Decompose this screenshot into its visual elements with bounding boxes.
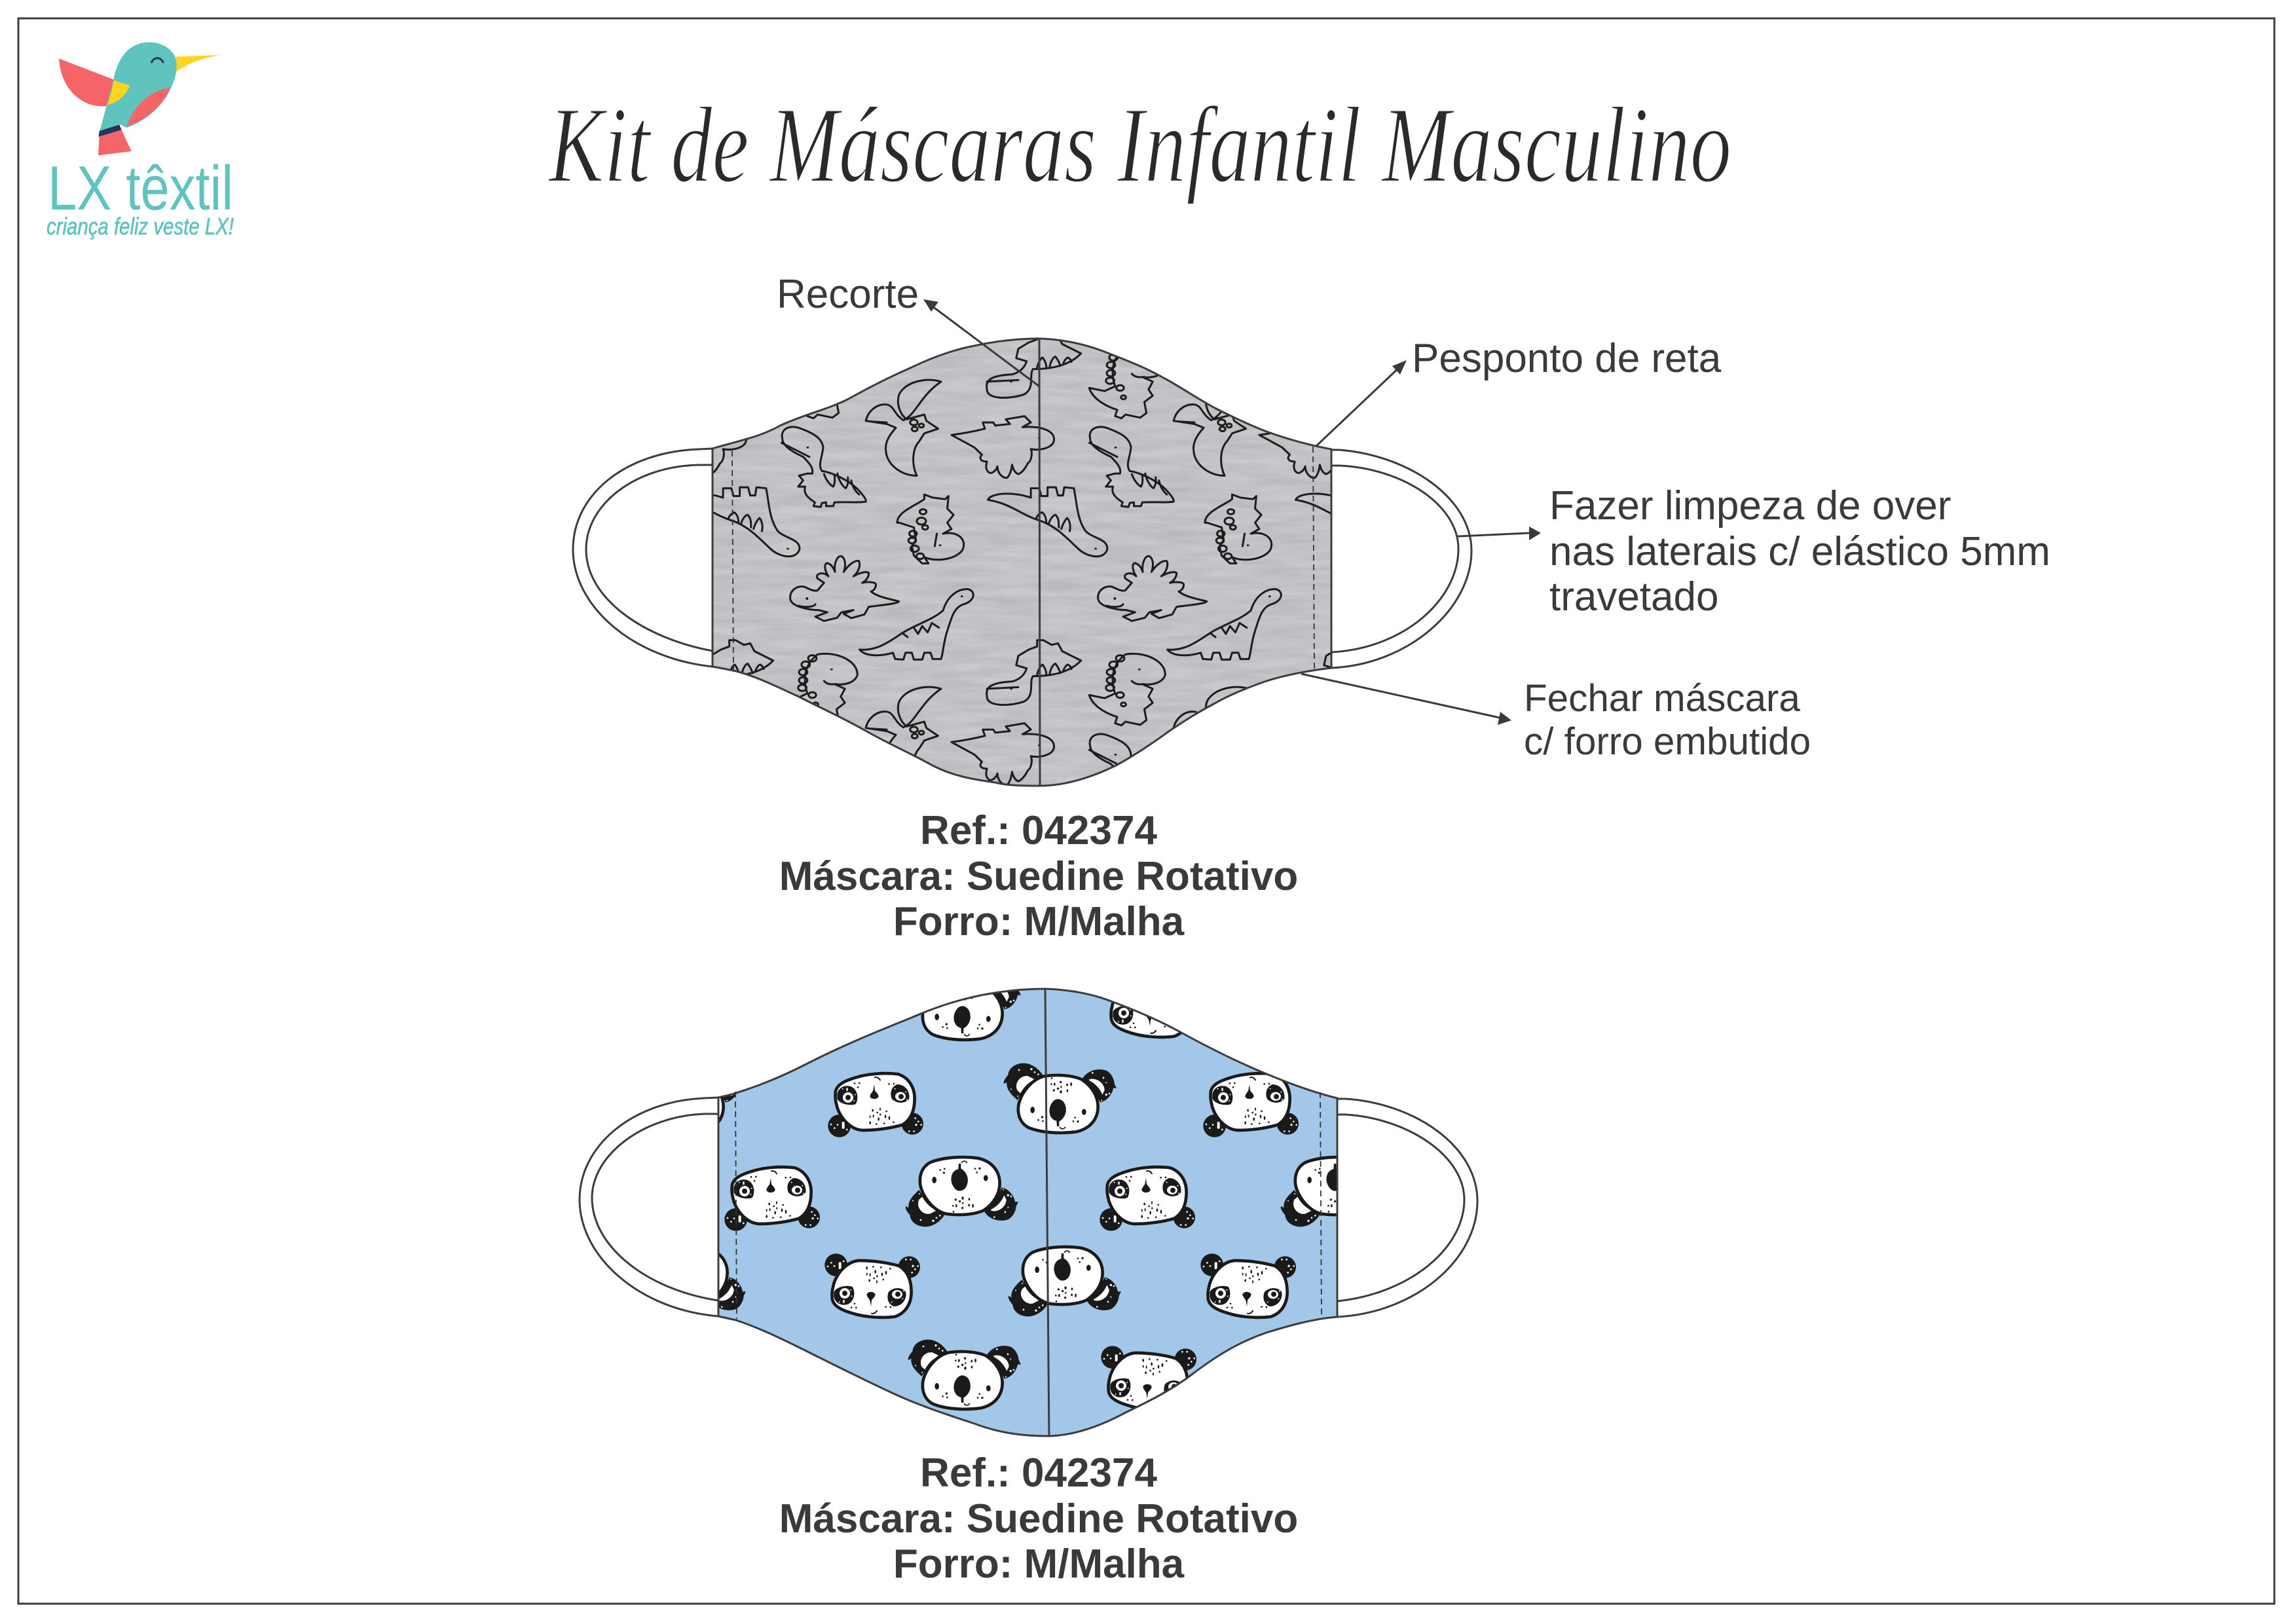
mask 1: grey dinosaur fabric [572,338,1472,787]
label: elastic note: Fazer limpeza de over [1549,483,1951,528]
logo tagline: criança feliz veste LX! [46,213,234,240]
label: fechar note: Fechar máscara [1524,677,1800,720]
label: elastic note: nas laterais c/ elástico 5mm [1549,529,2050,574]
mask 1 outline and seams [712,339,1331,786]
arrow: recorte [923,299,1039,386]
elastic ear loop right [1337,1099,1477,1317]
mask 2 outline and seams [718,989,1337,1436]
caption: mask 1 reference: Máscara: Suedine Rotativo [779,854,1298,899]
arrow: elastic [1458,526,1541,540]
elastic ear loop left [573,449,712,667]
label: Recorte: Recorte [777,272,919,317]
arrow: fechar [1301,674,1511,725]
icon: hummingbird [59,43,221,155]
caption: mask 1 reference: Ref.: 042374 [920,808,1157,853]
caption: mask 1 reference: Forro: M/Malha [893,899,1185,944]
panda and koala fabric pattern [719,990,1336,1435]
label: Pesponto de reta: Pesponto de reta [1412,336,1722,381]
caption: mask 2 reference: Ref.: 042374 [920,1450,1157,1496]
elastic ear loop right [1331,450,1471,668]
label: elastic note: travetado [1549,574,1719,619]
logo wordmark: LX têxtil [48,153,233,223]
logo: LX têxtil [46,43,234,240]
dinosaur fabric pattern [714,339,1331,784]
mask 2: blue panda and koala fabric [580,970,1477,1441]
caption: mask 2 reference: Forro: M/Malha [893,1541,1185,1587]
caption: mask 2 reference: Máscara: Suedine Rotativo [779,1496,1298,1541]
label: fechar note: c/ forro embutido [1524,720,1811,763]
arrow: pesponto [1316,360,1407,446]
title: Kit de Máscaras Infantil Masculino [547,84,1731,205]
elastic ear loop left [580,1098,718,1316]
